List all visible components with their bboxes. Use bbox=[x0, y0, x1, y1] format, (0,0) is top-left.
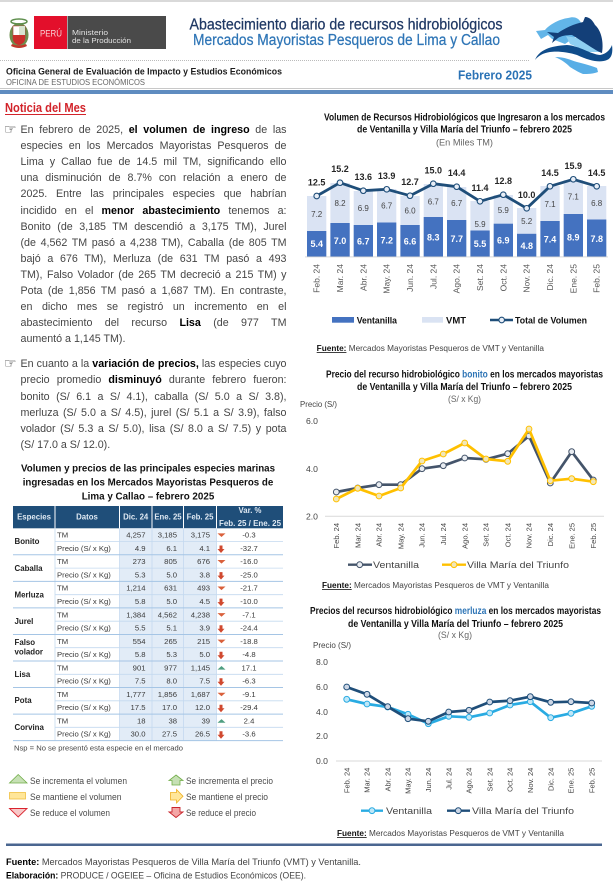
row: Corvina: 39 bbox=[201, 716, 210, 726]
legend: Villa María del Triunfo bbox=[472, 806, 574, 817]
data labels: Ventanilla: 6.6 bbox=[404, 236, 416, 246]
row: Merluza: 5.8 bbox=[135, 597, 146, 606]
data labels: total: 13.6 bbox=[355, 172, 372, 182]
legend: Ventanilla bbox=[357, 316, 398, 326]
line: total bbox=[314, 176, 600, 211]
office name: Oficina General de Evaluación de Impacto y Estudios Económicos bbox=[6, 66, 282, 78]
source: merluza: Fuente: Mercados Mayoristas Pesqueros de VMT y Ventanilla bbox=[337, 829, 565, 838]
icon: price stays bbox=[170, 790, 183, 803]
title: Mercados Mayoristas Pesqueros de Lima y Callao bbox=[193, 32, 500, 49]
row: Caballa: -16.0 bbox=[240, 557, 258, 566]
text block: variación de precios: (S/ 17.0 a S/ 12.0). bbox=[20, 439, 110, 451]
chart: merluza price lines: Precio (S/) bbox=[313, 640, 351, 650]
row: Corvina: -3.6 bbox=[242, 730, 256, 739]
row: Falso volador: -18.8 bbox=[240, 637, 258, 646]
data labels: total: 12.7 bbox=[401, 177, 419, 187]
text block: volumen de ingreso: en dicho mes se registró un incremento en el bbox=[20, 301, 286, 313]
row: Jurel: -7.1 bbox=[242, 610, 256, 619]
data labels: Ventanilla bbox=[310, 232, 603, 251]
axis labels: months: Ene. 25 bbox=[568, 264, 578, 293]
legend: VMT bbox=[446, 316, 466, 326]
row: Falso volador: Precio (S/ x Kg) bbox=[57, 650, 111, 659]
chart title: volumen: (En Miles TM) bbox=[436, 138, 493, 148]
data labels: VMT: 6.7 bbox=[451, 199, 463, 208]
top band bbox=[0, 0, 613, 2]
text block: variación de precios bbox=[4, 356, 286, 451]
data labels: Ventanilla: 4.8 bbox=[520, 241, 533, 251]
icon: price increases bbox=[169, 775, 183, 785]
axis labels: months: Dic. 24 bbox=[545, 264, 555, 290]
row: Falso volador: Falso bbox=[14, 638, 35, 647]
row: Lisa: 8.0 bbox=[166, 677, 177, 686]
text block: volumen de ingreso: bajó a 676 TM), Merluza (de 631 TM pasó a 493 bbox=[20, 253, 286, 265]
axis labels: months: Feb. 24 bbox=[332, 523, 341, 548]
row: Caballa: TM bbox=[57, 557, 68, 566]
chart title: merluza bbox=[310, 606, 601, 640]
row: Lisa: Lisa bbox=[14, 670, 31, 679]
row: Corvina: 2.4 bbox=[244, 716, 255, 726]
axis ticks: 4.0 bbox=[316, 707, 328, 717]
row: Corvina: 38 bbox=[168, 716, 177, 726]
row: Jurel: 1,384 bbox=[126, 610, 146, 619]
axis ticks: 6.0 bbox=[316, 682, 328, 692]
axis ticks: 2.0 bbox=[316, 731, 328, 741]
row: Pota: -9.1 bbox=[242, 690, 256, 699]
axis labels: months: Mar. 24 bbox=[353, 523, 362, 548]
row: Caballa: Caballa bbox=[14, 564, 43, 573]
row: Merluza: 4.5 bbox=[199, 597, 210, 606]
row: Falso volador: 554 bbox=[133, 637, 146, 646]
row: Falso volador: 5.8 bbox=[135, 650, 146, 659]
table title: ingresadas en los Mercados Mayoristas Pesqueros de bbox=[23, 478, 274, 488]
row: Bonito: Bonito bbox=[14, 537, 40, 546]
axis labels: months bbox=[312, 264, 602, 294]
legend bbox=[361, 806, 574, 817]
chart: bonito price lines: Precio (S/) bbox=[300, 399, 337, 409]
data labels: total: 15.0 bbox=[425, 166, 442, 176]
line: Ventanilla bbox=[344, 696, 595, 727]
row: Jurel: 5.1 bbox=[166, 624, 177, 633]
text block: volumen de ingreso: aumentó a 1,145 TM). bbox=[20, 333, 125, 345]
table title bbox=[21, 464, 275, 502]
axis labels: months: Mar. 24 bbox=[335, 264, 345, 292]
source: bonito: Fuente: Mercados Mayoristas Pesqueros de VMT y Ventanilla bbox=[322, 581, 550, 590]
axis labels: months: Jul. 24 bbox=[439, 523, 448, 545]
row: Corvina: 30.0 bbox=[131, 730, 146, 739]
axis labels: months: Feb. 24 bbox=[312, 264, 322, 293]
axis labels: months: Oct. 24 bbox=[506, 768, 515, 792]
logo: red box: PERÚ bbox=[40, 28, 62, 40]
data labels: Ventanilla: 7.7 bbox=[450, 234, 463, 244]
row: Caballa: 5.0 bbox=[166, 570, 177, 580]
bars: VMT bbox=[307, 180, 606, 257]
legend: volume and price symbols bbox=[10, 774, 273, 818]
text block: volumen de ingreso: En febrero de 2025, el volumen de ingreso de las bbox=[20, 124, 286, 136]
row: Merluza: -21.7 bbox=[240, 584, 258, 593]
icon: volume falls bbox=[10, 808, 27, 817]
row: Bonito: 3,175 bbox=[191, 531, 210, 540]
text block: volumen de ingreso: Pota (de 1,856 TM pasó a 1,687 TM). En contraste, bbox=[20, 285, 286, 297]
row: Pota: 1,687 bbox=[191, 690, 210, 699]
row: Caballa: Precio (S/ x Kg) bbox=[57, 570, 111, 580]
logo: dark box bbox=[68, 16, 166, 49]
row: Merluza: 5.0 bbox=[166, 597, 177, 606]
row: Corvina: Precio (S/ x Kg) bbox=[57, 730, 111, 739]
row: Caballa: 805 bbox=[164, 557, 177, 566]
icon: fish and waves bbox=[535, 17, 612, 74]
axis labels: months: May. 24 bbox=[404, 768, 413, 794]
legend bbox=[332, 316, 587, 326]
text block: volumen de ingreso: abastecimiento del recurso Lisa (de 977 TM bbox=[20, 317, 286, 329]
chart title: volumen bbox=[324, 112, 605, 148]
axis labels: months: Abr. 24 bbox=[358, 264, 368, 291]
chart title: bonito: de Ventanilla y Villa María del Triunfo – febrero 2025 bbox=[357, 382, 572, 393]
chart title: volumen: de Ventanilla y Villa María del Triunfo – febrero 2025 bbox=[357, 124, 572, 136]
row: Corvina: 27.5 bbox=[162, 730, 177, 739]
table: species volume and prices bbox=[13, 506, 283, 741]
row: Lisa: -6.3 bbox=[242, 677, 256, 686]
row: Falso volador: 5.0 bbox=[199, 650, 210, 659]
row: Jurel: 3.9 bbox=[199, 624, 210, 633]
axis labels: months: Set. 24 bbox=[485, 768, 494, 791]
axis ticks: 8.0 bbox=[316, 657, 328, 667]
data labels: Ventanilla: 8.9 bbox=[567, 232, 580, 242]
table header: Feb. 25 bbox=[187, 512, 214, 522]
data labels: total: 12.5 bbox=[308, 178, 325, 188]
legend: Villa María del Triunfo bbox=[467, 560, 569, 571]
legend: volume and price symbols: Se incrementa el precio bbox=[186, 776, 273, 786]
data labels: VMT: 6.7 bbox=[428, 198, 439, 206]
row: Falso volador: TM bbox=[57, 637, 68, 646]
icon: volume increases bbox=[10, 774, 27, 783]
axis labels: months: Dic. 24 bbox=[546, 523, 555, 546]
bars: Ventanilla bbox=[307, 214, 606, 257]
row: Lisa: 977 bbox=[164, 663, 177, 672]
data labels: Ventanilla: 7.0 bbox=[334, 236, 346, 246]
row: Bonito: 4.9 bbox=[135, 544, 146, 553]
footer: source and credits: Elaboración: PRODUCE / OGEIEE – Oficina de Estudios Económicos (OEE). bbox=[6, 870, 306, 880]
axis labels: months: Nov. 24 bbox=[522, 264, 532, 293]
text block: volumen de ingreso: Lima y Callao fue de 14.5 mil TM, significando ello bbox=[20, 156, 286, 168]
data labels: VMT: 6.7 bbox=[381, 202, 393, 210]
office name: OFICINA DE ESTUDIOS ECONÓMICOS bbox=[6, 78, 145, 87]
row: Falso volador: 265 bbox=[164, 637, 177, 646]
table header: Datos bbox=[76, 512, 98, 522]
icon: coat of arms bbox=[10, 19, 28, 48]
axis labels: months bbox=[332, 523, 598, 549]
chart: volumen stacked bars and total line bbox=[305, 161, 608, 326]
chart title: merluza: de Ventanilla y Villa María del Triunfo – febrero 2025 bbox=[348, 619, 563, 630]
data labels: total: 11.4 bbox=[471, 183, 489, 193]
row: Jurel: -24.4 bbox=[240, 624, 258, 633]
data labels: VMT: 7.1 bbox=[568, 192, 579, 202]
row: Pota: -29.4 bbox=[240, 703, 258, 712]
icon: pointing hand: ☞ bbox=[4, 122, 17, 138]
axis labels: months: Jul. 24 bbox=[428, 264, 438, 289]
text block: variación de precios: merluza (S/ 5.0 a S/ 4.5), jurel (S/ 5.1 a S/ 3.9), falso bbox=[20, 407, 286, 419]
row: Caballa: 3.8 bbox=[199, 570, 210, 580]
text block: volumen de ingreso: una disminución de 8.7% con relación a enero de bbox=[20, 172, 286, 184]
date: Febrero 2025 bbox=[458, 68, 532, 82]
chart: bonito price lines bbox=[300, 399, 604, 571]
axis labels: months: Oct. 24 bbox=[498, 264, 508, 291]
data labels: Ventanilla: 5.4 bbox=[310, 239, 323, 249]
row: Bonito: 4,257 bbox=[126, 531, 146, 540]
row: Lisa: 901 bbox=[133, 663, 146, 672]
logo: red box bbox=[34, 16, 67, 49]
row: Falso volador: -4.8 bbox=[242, 650, 256, 659]
data labels: total: 10.0 bbox=[518, 190, 535, 200]
row: Falso volador: volador bbox=[14, 647, 43, 656]
data labels: VMT: 7.1 bbox=[544, 200, 556, 209]
axis labels: months: Feb. 24 bbox=[342, 768, 351, 793]
row: Lisa: 17.1 bbox=[242, 663, 256, 672]
text block: variación de precios: bonito (S/ 6.1 a S/ 4.1), caballa (S/ 5.0 a S/ 3.8), bbox=[20, 391, 286, 403]
data labels: Ventanilla: 5.5 bbox=[474, 239, 486, 249]
data labels: VMT: 5.9 bbox=[498, 206, 509, 215]
chart title: bonito bbox=[326, 370, 603, 404]
chart title: bonito: (S/ x Kg) bbox=[448, 394, 481, 404]
axis labels: months: Jul. 24 bbox=[444, 768, 453, 790]
text block: volumen de ingreso: (de 4,562 TM pasó a 4,238 TM), Caballa (de 805 TM bbox=[20, 237, 286, 249]
axis labels: months: Jun. 24 bbox=[405, 264, 415, 292]
table header: Ene. 25 bbox=[154, 512, 182, 522]
row: Bonito: 6.1 bbox=[166, 544, 177, 553]
text block: volumen de ingreso: incidido en el menor abastecimiento tenemos a: bbox=[20, 204, 286, 216]
row: Lisa: 1,145 bbox=[191, 663, 210, 672]
axis labels: months: Feb. 25 bbox=[592, 264, 602, 293]
text block: variación de precios: En cuanto a la variación de precios, las especies cuyo bbox=[20, 358, 286, 370]
row: Lisa: TM bbox=[57, 663, 68, 672]
row: Merluza: Merluza bbox=[14, 590, 44, 599]
data labels: total: 15.2 bbox=[331, 164, 349, 174]
axis labels: months: Ago. 24 bbox=[452, 264, 462, 293]
text block: variación de precios: precio promedio disminuyó durante febrero fueron: bbox=[20, 374, 286, 386]
axis labels: months: Nov. 24 bbox=[526, 768, 535, 793]
axis labels: months: Set. 24 bbox=[482, 523, 491, 547]
title: Abastecimiento diario de recursos hidrobiológicos bbox=[190, 16, 503, 34]
legend: volume and price symbols: Se mantiene el volumen bbox=[30, 792, 122, 802]
icon: pointing hand: ☞ bbox=[4, 356, 17, 372]
data labels: VMT: 5.9 bbox=[474, 220, 486, 229]
data labels: Ventanilla: 6.9 bbox=[497, 236, 510, 246]
row: Lisa: 7.5 bbox=[135, 677, 146, 686]
table header: Feb. 25 / Ene. 25 bbox=[219, 519, 282, 528]
axis labels: months: Ago. 24 bbox=[460, 523, 469, 549]
line: Villa María del Triunfo bbox=[333, 426, 596, 502]
row: Pota: 17.5 bbox=[131, 703, 146, 712]
row: Bonito: Precio (S/ x Kg) bbox=[57, 544, 111, 553]
axis labels: months: Nov. 24 bbox=[525, 523, 534, 548]
row: Pota bbox=[14, 690, 258, 712]
row: Bonito: 3,185 bbox=[158, 531, 177, 540]
axis labels: months: Ene. 25 bbox=[567, 523, 576, 549]
footer: source and credits bbox=[6, 857, 361, 880]
row: Corvina: TM bbox=[57, 716, 68, 726]
axis labels: months: Mar. 24 bbox=[363, 768, 372, 793]
row: Jurel: 4,238 bbox=[191, 610, 210, 619]
row: Pota: Pota bbox=[14, 696, 32, 705]
legend: volume and price symbols: Se reduce el precio bbox=[186, 808, 256, 818]
table header bbox=[13, 506, 283, 528]
data labels: VMT: 8.2 bbox=[334, 199, 346, 208]
axis labels: months: Ago. 24 bbox=[465, 768, 474, 794]
legend: Ventanilla bbox=[386, 806, 433, 817]
data labels: VMT: 7.2 bbox=[311, 210, 323, 219]
table note: Nsp = No se presentó esta especie en el mercado bbox=[14, 743, 183, 752]
axis labels: months: May. 24 bbox=[396, 523, 405, 549]
row: Bonito: TM bbox=[57, 531, 68, 540]
data labels: total: 14.5 bbox=[588, 168, 605, 178]
data labels: total: 14.4 bbox=[448, 168, 465, 178]
axis ticks: 2.0 bbox=[306, 511, 318, 521]
data labels: Ventanilla: 8.3 bbox=[427, 232, 440, 242]
office name bbox=[6, 66, 282, 87]
data labels: VMT: 6.9 bbox=[358, 204, 369, 213]
footer: source and credits: Fuente: Mercados Mayoristas Pesqueros de Villa María del Triunfo (VMT) y Ventanilla. bbox=[6, 857, 361, 867]
table title: Lima y Callao – febrero 2025 bbox=[82, 492, 215, 502]
row: Caballa bbox=[14, 557, 258, 580]
line: Villa María del Triunfo bbox=[344, 684, 595, 724]
text block: variación de precios: volador (S/ 5.3 a S/ 5.0), lisa (S/ 8.0 a S/ 7.5) y pota bbox=[20, 423, 286, 435]
row: Corvina: Corvina bbox=[14, 723, 44, 732]
row: Caballa: 676 bbox=[197, 557, 210, 566]
row: Falso volador bbox=[14, 637, 258, 659]
row: Corvina bbox=[14, 716, 256, 739]
row: Jurel: 5.5 bbox=[135, 624, 146, 633]
axis ticks bbox=[316, 657, 328, 766]
data labels: total: 13.9 bbox=[378, 171, 395, 181]
legend bbox=[348, 560, 569, 571]
axis labels: months: Feb. 25 bbox=[589, 523, 598, 548]
row: Jurel: Jurel bbox=[14, 617, 33, 626]
row: Jurel: TM bbox=[57, 610, 68, 619]
row: Caballa: 5.3 bbox=[135, 570, 146, 580]
row: Caballa: 273 bbox=[133, 557, 146, 566]
axis labels: months: Set. 24 bbox=[475, 264, 485, 291]
axis ticks: 6.0 bbox=[306, 416, 318, 426]
text block: volumen de ingreso: 2025. Entre las principales especies que habrían bbox=[20, 188, 286, 200]
row: Lisa: Precio (S/ x Kg) bbox=[57, 677, 111, 686]
table header: Especies bbox=[17, 512, 52, 522]
icon: volume stays bbox=[10, 792, 26, 799]
row: Merluza: 631 bbox=[164, 584, 177, 593]
axis ticks: 0.0 bbox=[316, 756, 328, 766]
data labels: total: 14.5 bbox=[541, 168, 559, 178]
row: Corvina: 26.5 bbox=[195, 730, 210, 739]
chart: merluza price lines bbox=[313, 640, 602, 817]
data labels: VMT: 6.0 bbox=[404, 206, 416, 216]
row: Pota: 17.0 bbox=[162, 703, 177, 712]
row: Lisa: 7.5 bbox=[199, 677, 210, 686]
logo: dark box: de la Producción bbox=[72, 36, 131, 45]
row: Merluza: TM bbox=[57, 584, 68, 593]
axis labels: months: Jun. 24 bbox=[418, 523, 427, 548]
icon: price falls bbox=[169, 808, 183, 818]
axis labels: months: May. 24 bbox=[382, 264, 392, 294]
data labels: total: 15.9 bbox=[565, 161, 582, 171]
data labels: Ventanilla: 7.8 bbox=[590, 234, 603, 244]
logo: Ministerio de la Producción bbox=[10, 16, 166, 49]
axis labels: months: Abr. 24 bbox=[375, 523, 384, 547]
row: Pota: 1,856 bbox=[158, 690, 177, 699]
axis labels: months: Oct. 24 bbox=[503, 523, 512, 547]
row: Pota: TM bbox=[57, 690, 68, 699]
row: Merluza: Precio (S/ x Kg) bbox=[57, 597, 111, 606]
row: Falso volador: 5.3 bbox=[166, 650, 177, 659]
row: Jurel bbox=[14, 610, 258, 633]
row: Pota: Precio (S/ x Kg) bbox=[57, 703, 111, 712]
axis labels: months bbox=[342, 768, 596, 794]
line: Ventanilla bbox=[333, 433, 596, 495]
row: Bonito: -32.7 bbox=[240, 544, 258, 553]
axis labels: months: Dic. 24 bbox=[546, 768, 555, 791]
legend: Ventanilla bbox=[373, 560, 420, 571]
data labels: Ventanilla: 7.4 bbox=[544, 234, 556, 244]
data labels: total bbox=[308, 161, 605, 200]
axis labels: months: Jun. 24 bbox=[424, 768, 433, 792]
legend: volume and price symbols: Se incrementa el volumen bbox=[30, 776, 127, 786]
text block: volumen de ingreso bbox=[4, 122, 286, 345]
data labels: Ventanilla: 7.2 bbox=[380, 235, 393, 245]
data labels: total: 12.8 bbox=[495, 176, 512, 186]
row: Lisa bbox=[14, 663, 256, 686]
data labels: VMT: 6.8 bbox=[591, 199, 603, 208]
chart title: merluza: (S/ x Kg) bbox=[438, 630, 472, 640]
table header: Dic. 24 bbox=[123, 512, 149, 522]
row: Bonito: -0.3 bbox=[242, 531, 256, 540]
row: Merluza: 493 bbox=[197, 584, 210, 593]
logo: dark box: Ministerio bbox=[72, 28, 108, 37]
data labels: VMT: 5.2 bbox=[521, 217, 533, 226]
data labels: Ventanilla: 6.7 bbox=[357, 236, 370, 246]
axis ticks bbox=[306, 416, 318, 521]
table header: Var. % bbox=[239, 506, 262, 515]
axis labels: months: Feb. 25 bbox=[587, 768, 596, 793]
source: volumen: Fuente: Mercados Mayoristas Pesqueros de VMT y Ventanilla bbox=[317, 344, 545, 353]
row: Merluza: -10.0 bbox=[240, 597, 258, 606]
row: Jurel: Precio (S/ x Kg) bbox=[57, 624, 111, 633]
row: Caballa: -25.0 bbox=[240, 570, 258, 580]
row: Bonito bbox=[14, 531, 258, 553]
legend: volume and price symbols: Se reduce el volumen bbox=[30, 808, 110, 818]
heading: Noticia del Mes: Noticia del Mes bbox=[5, 101, 86, 115]
axis labels: months: Ene. 25 bbox=[567, 768, 576, 794]
row: Merluza: 1,214 bbox=[126, 584, 146, 593]
row: Pota: 12.0 bbox=[195, 703, 210, 712]
row: Corvina: 18 bbox=[137, 716, 146, 726]
text block: volumen de ingreso: Bonito (de 3,185 TM descendió a 3,175 TM), Jurel bbox=[20, 221, 286, 233]
data labels: VMT bbox=[311, 192, 603, 229]
text block: volumen de ingreso: especies en los Mercados Mayoristas Pesqueros de bbox=[20, 140, 286, 152]
legend: volume and price symbols: Se mantiene el precio bbox=[186, 792, 268, 802]
row: Bonito: 4.1 bbox=[199, 544, 210, 553]
axis ticks: 4.0 bbox=[306, 464, 318, 474]
row: Merluza bbox=[14, 584, 258, 606]
legend: Total de Volumen bbox=[515, 316, 587, 326]
title bbox=[190, 16, 503, 49]
row: Pota: 1,777 bbox=[126, 690, 146, 699]
row: Falso volador: 215 bbox=[197, 637, 210, 646]
axis labels: months: Abr. 24 bbox=[383, 768, 392, 791]
table title: Volumen y precios de las principales especies marinas bbox=[21, 464, 275, 474]
row: Jurel: 4,562 bbox=[158, 610, 177, 619]
text block: volumen de ingreso: TM), Falso Volador (de 265 TM decreció a 215 TM) y bbox=[20, 269, 286, 281]
